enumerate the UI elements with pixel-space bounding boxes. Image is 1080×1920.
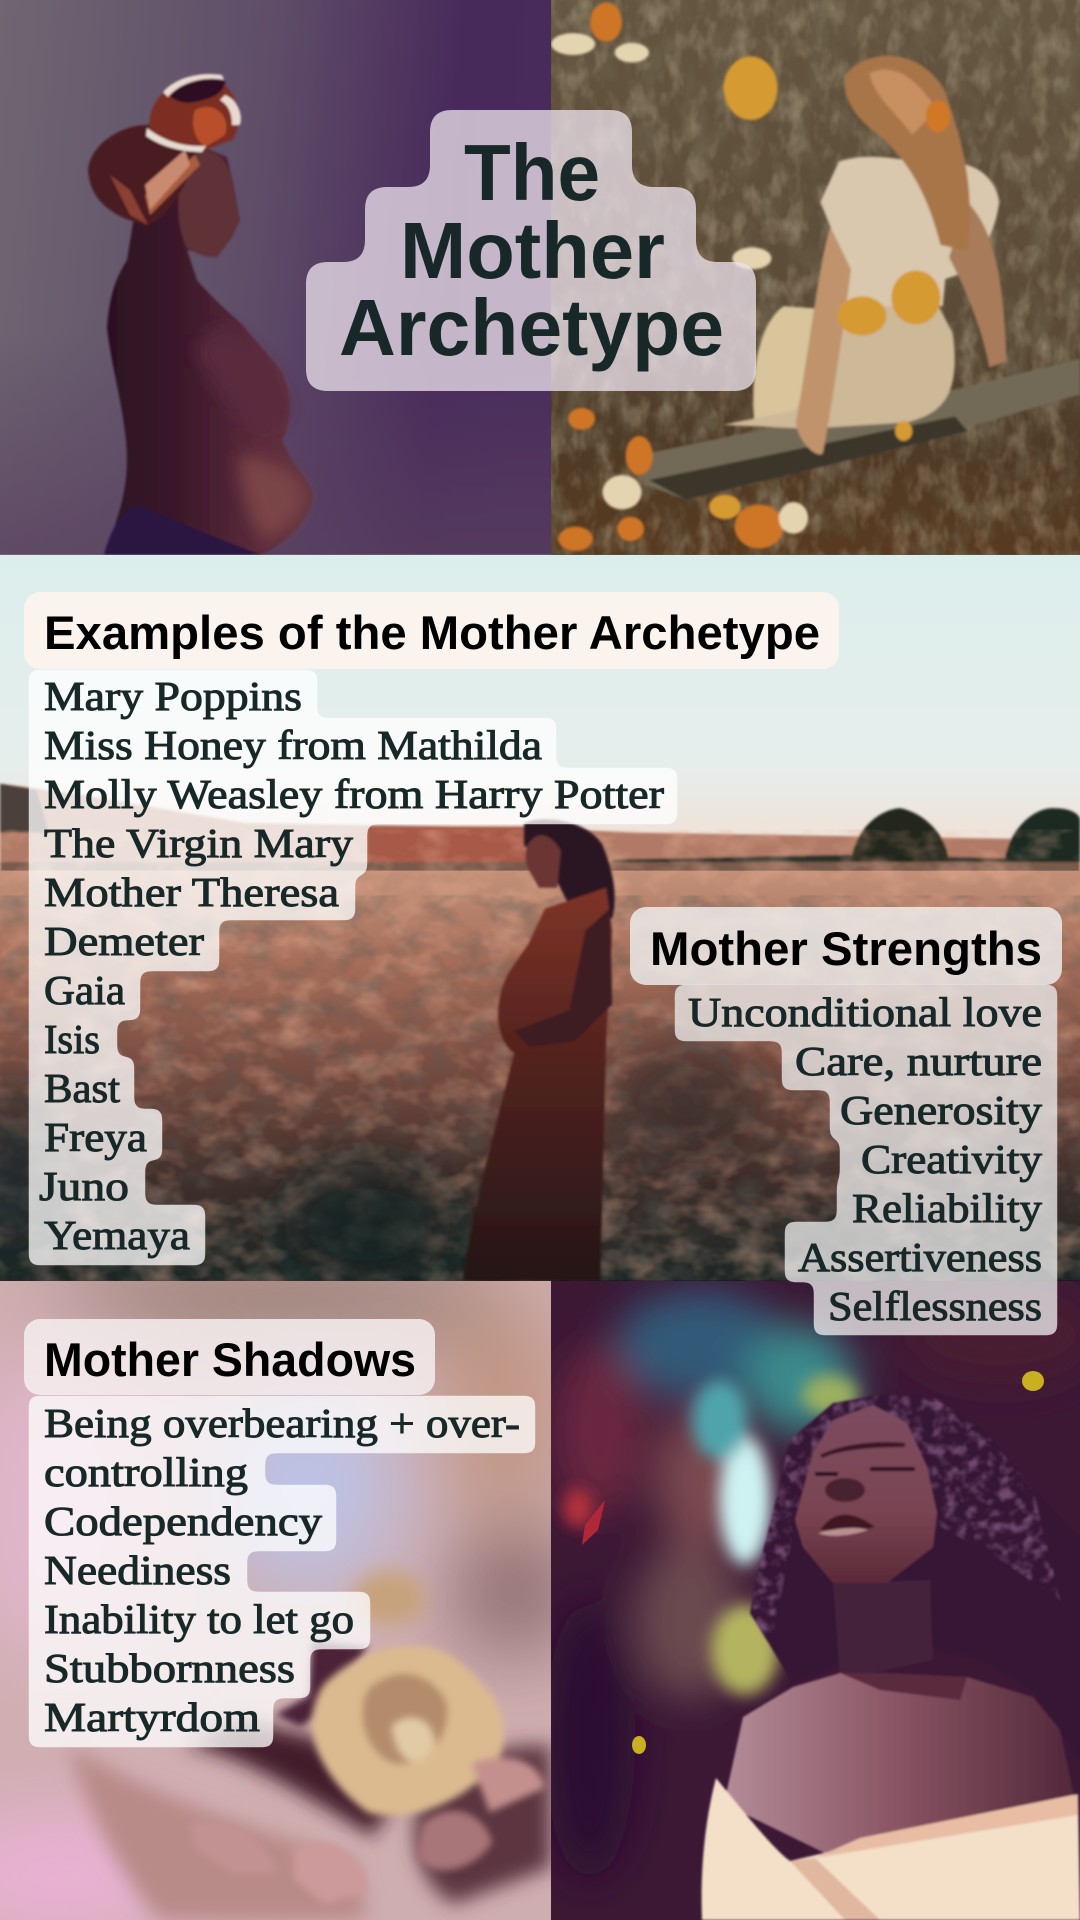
strengths heading: Mother Strengths [650,922,1042,975]
examples list: Miss Honey from Mathilda [44,722,542,768]
examples list: Molly Weasley from Harry Potter [44,771,664,817]
strengths text backing [675,985,1057,1335]
shadows list: controlling [44,1449,248,1495]
shadows list [44,1400,520,1740]
panel: examples of the mother archetype [24,592,839,1265]
photo panel: pregnant woman in a field at sunset [0,555,1080,1286]
strengths list: Creativity [861,1136,1043,1182]
examples list: Juno [39,1163,129,1209]
strengths list: Unconditional love [688,989,1042,1035]
shadows list: Being overbearing + over- [44,1400,520,1446]
examples list: Gaia [44,967,125,1013]
strengths list: Selflessness [828,1283,1042,1329]
examples list: Mary Poppins [44,673,302,719]
examples list: Yemaya [44,1212,190,1258]
panel: mother shadows [24,1319,535,1747]
examples list: Bast [44,1065,121,1111]
examples list: The Virgin Mary [44,820,354,866]
strengths list: Care, nurture [795,1038,1042,1084]
photo panel: woman with curly hair and bokeh background [545,1281,1080,1920]
strengths list: Reliability [852,1185,1043,1231]
strengths heading [630,907,1062,985]
examples list: Freya [44,1114,147,1160]
title badge: Mother [400,206,665,295]
title badge: The [464,128,600,217]
photo panel: blurred hands holding a dried rose [0,1261,576,1920]
shadows list: Codependency [44,1498,323,1544]
shadows text backing [29,1396,535,1747]
shadows heading [24,1319,435,1395]
panel: mother strengths [630,907,1062,1335]
shadows list: Neediness [44,1547,231,1593]
photo panel: woman sitting in a flower meadow [551,0,1080,555]
shadows list: Martyrdom [44,1694,260,1740]
title badge: Archetype [339,283,724,372]
examples text backing [29,670,677,1265]
strengths list: Generosity [840,1087,1043,1133]
examples list: Isis [44,1016,100,1062]
examples list: Demeter [44,918,204,964]
title badge [306,110,756,391]
shadows list: Stubbornness [44,1645,295,1691]
examples list: Mother Theresa [44,869,339,915]
strengths list: Assertiveness [798,1234,1042,1280]
examples heading [24,592,839,669]
shadows list: Inability to let go [44,1596,354,1642]
examples list [39,673,664,1258]
examples heading: Examples of the Mother Archetype [44,606,820,659]
shadows heading: Mother Shadows [44,1333,416,1386]
photo panel: pregnant woman in head wrap on purple [0,0,551,555]
strengths list [688,989,1043,1329]
